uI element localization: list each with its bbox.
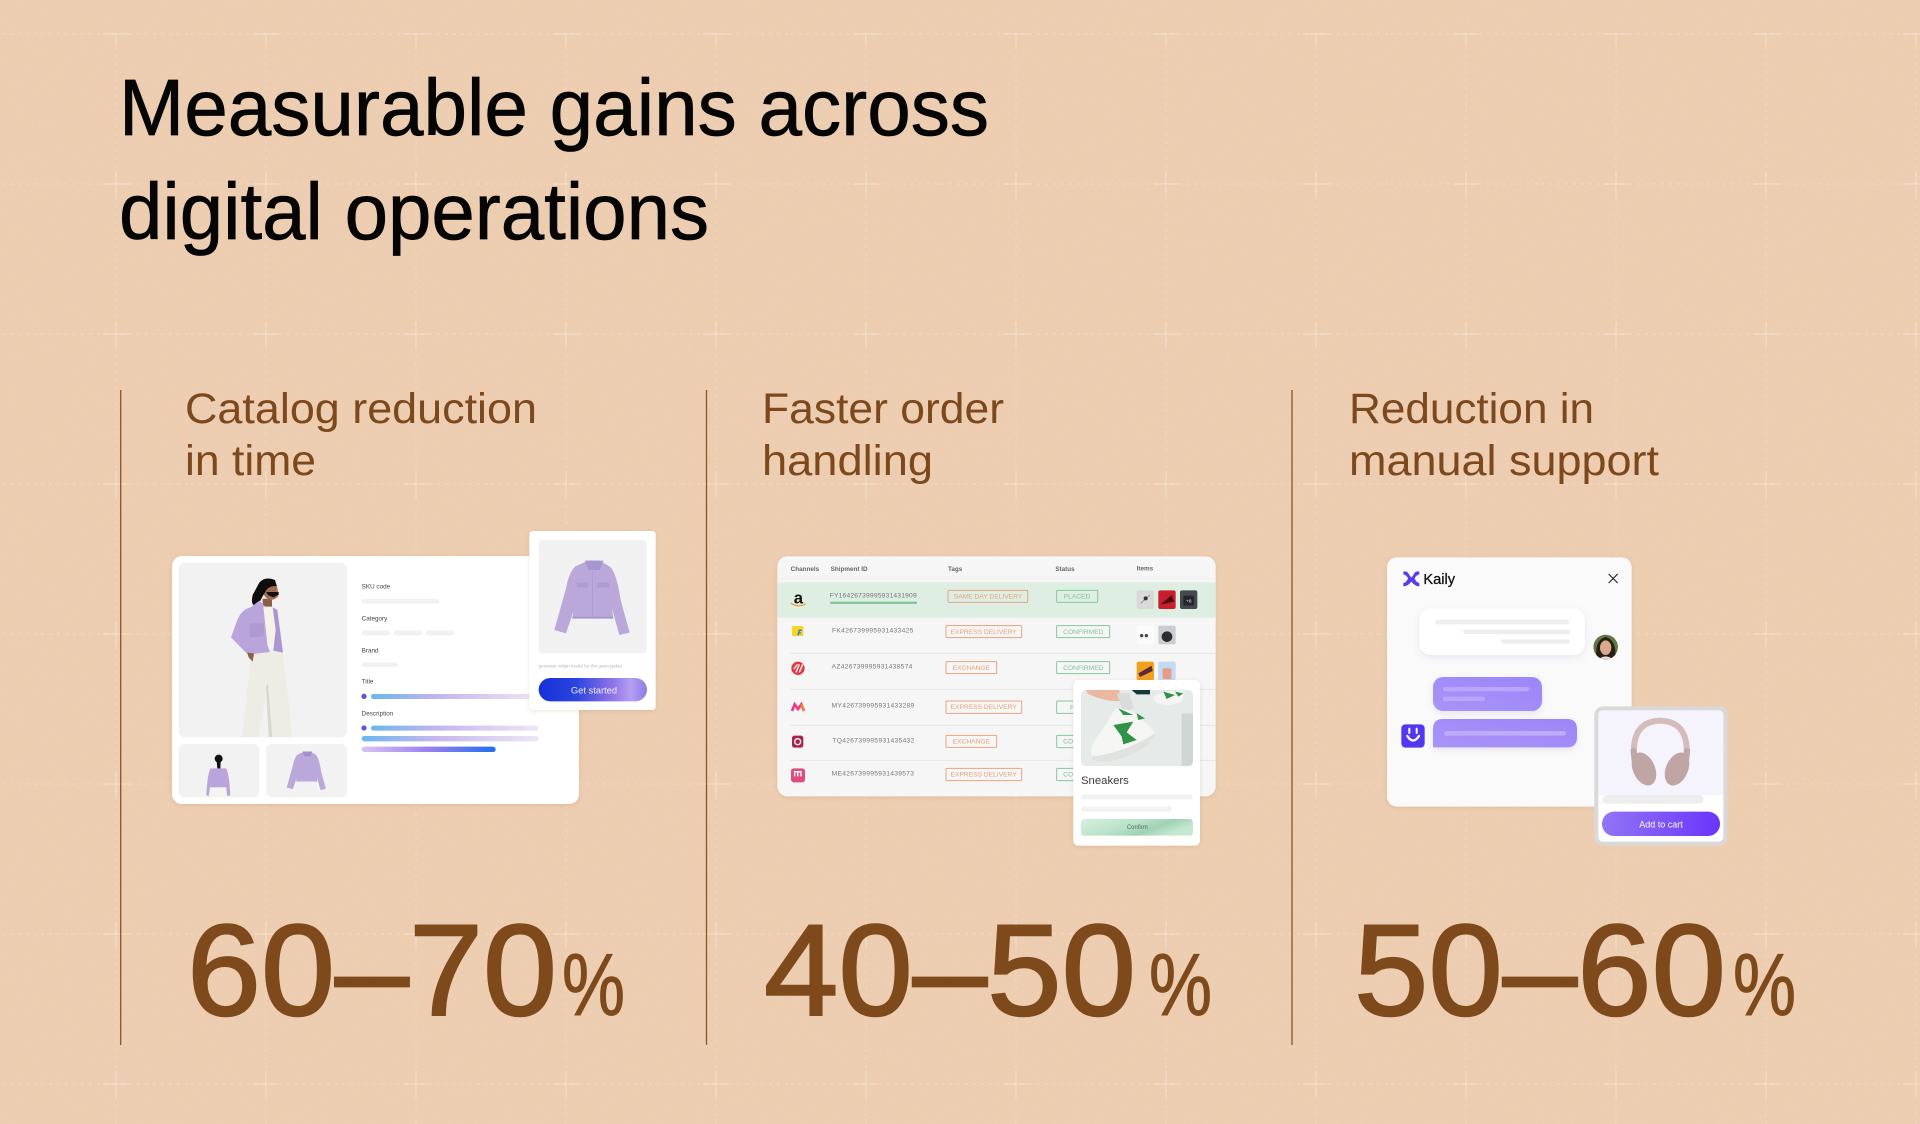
- stat: 60–70%: 60–70: [187, 897, 557, 1043]
- heading: reduction in manual support: [1349, 385, 1659, 485]
- stat: 40–50%: %: [1149, 935, 1212, 1034]
- item thumbnails: +8: [1186, 598, 1192, 604]
- table header: Tags: [948, 566, 963, 573]
- back view thumbnail: [206, 755, 230, 797]
- heading: catalog reduction in time: in time: [185, 437, 316, 485]
- tag labels: EXPRESS DELIVERY: [951, 704, 1017, 711]
- catalog form fields: Category: [362, 616, 388, 623]
- heading: reduction in manual support: manual support: [1349, 437, 1659, 485]
- stat: 40–50%: 40–50: [764, 897, 1136, 1043]
- tag labels: EXCHANGE: [953, 665, 991, 672]
- tag labels: EXPRESS DELIVERY: [951, 772, 1017, 779]
- user message bubble: [1419, 609, 1585, 655]
- product card: [1594, 706, 1727, 846]
- stat: 60–70%: %: [562, 935, 625, 1034]
- model photo: [231, 578, 292, 737]
- panel: reduction in manual support: [1292, 385, 1796, 1045]
- get started button: [539, 678, 647, 701]
- tag labels: SAME DAY DELIVERY: [954, 594, 1023, 601]
- channel logos: [791, 589, 806, 782]
- table header: Status: [1055, 566, 1075, 573]
- panel: catalog reduction: [121, 385, 656, 1045]
- tag labels: EXPRESS DELIVERY: [951, 629, 1017, 636]
- status labels: CONFIRMED: [1063, 665, 1104, 672]
- catalog form fields: Brand: [362, 647, 379, 654]
- title: [119, 63, 989, 256]
- catalog form fields: SKU code: [362, 584, 391, 591]
- shipment ids: TQ426739995931435432: [832, 737, 915, 744]
- shipment ids: ME426739995931439573: [832, 770, 914, 777]
- sneakers popup: Sneakers: [1081, 775, 1129, 787]
- add to cart button: Add to cart: [1639, 820, 1683, 830]
- table header: Items: [1137, 566, 1154, 573]
- status labels: CONFIRMED: [1063, 739, 1104, 746]
- sneaker photo: [1081, 690, 1193, 766]
- table header: Shipment ID: [831, 566, 868, 573]
- chat assistant screenshot: [1387, 557, 1727, 846]
- headphones: [1627, 721, 1694, 789]
- table header: [791, 566, 1154, 573]
- catalog form fields: [361, 584, 539, 752]
- confirm button: Confirm: [1127, 825, 1148, 831]
- jacket image: [554, 561, 630, 635]
- item thumbnails: [1137, 590, 1197, 680]
- catalog product screenshot: [172, 531, 656, 804]
- user avatar: [1593, 635, 1618, 660]
- generate popup: generate indian model for the given jacket: [539, 664, 623, 669]
- confirm button: [1081, 819, 1193, 836]
- heading: faster order handling: handling: [762, 437, 933, 485]
- channel logos: a: [794, 589, 804, 608]
- heading: reduction in manual support: Reduction in: [1349, 385, 1594, 433]
- shipment ids: FK426739995931433425: [832, 628, 914, 635]
- bot smiley icon: [1401, 724, 1425, 748]
- title: digital operations: [119, 167, 709, 256]
- sneakers popup: [1073, 680, 1200, 846]
- panel: faster order handling: [706, 385, 1216, 1045]
- stat: 50–60%: 50–60: [1354, 897, 1726, 1043]
- table header: Channels: [791, 566, 820, 573]
- status labels: PLACED: [1064, 594, 1091, 601]
- jacket thumbnail: [287, 751, 326, 790]
- title: Measurable gains across: [119, 63, 989, 152]
- kaily logo: Kaily: [1423, 572, 1456, 588]
- catalog card: [172, 556, 579, 804]
- orders table screenshot: [777, 556, 1216, 846]
- status labels: CONFIRMED: [1063, 772, 1104, 779]
- close icon: [1609, 574, 1618, 583]
- status labels: [1063, 594, 1104, 779]
- shipment ids: MY426739995931433289: [832, 703, 915, 710]
- tag labels: EXCHANGE: [953, 739, 991, 746]
- tag labels: [951, 594, 1023, 779]
- heading: faster order handling: Faster order: [762, 385, 1004, 433]
- shipment ids: FY16426739995931431909: [830, 592, 917, 599]
- status labels: PLACED: [1070, 704, 1097, 711]
- catalog form fields: Description: [362, 711, 394, 718]
- shipment ids: [830, 592, 917, 777]
- tag pills: [946, 590, 1028, 781]
- heading: catalog reduction in time: [185, 385, 537, 485]
- catalog form fields: Title: [362, 679, 374, 686]
- heading: catalog reduction in time: Catalog reduction: [185, 385, 537, 433]
- status labels: CONFIRMED: [1063, 629, 1104, 636]
- heading: faster order handling: [762, 385, 1004, 485]
- generate popup: [529, 531, 656, 710]
- shipment ids: AZ426739995931438574: [832, 664, 913, 671]
- chat window: [1387, 557, 1632, 807]
- table card: [777, 556, 1216, 796]
- kaily logo: [1403, 571, 1456, 588]
- status pills: [1057, 590, 1110, 781]
- bot reply bubbles: [1433, 677, 1577, 747]
- stat: 50–60%: %: [1733, 935, 1796, 1034]
- get started button: Get started: [571, 685, 617, 695]
